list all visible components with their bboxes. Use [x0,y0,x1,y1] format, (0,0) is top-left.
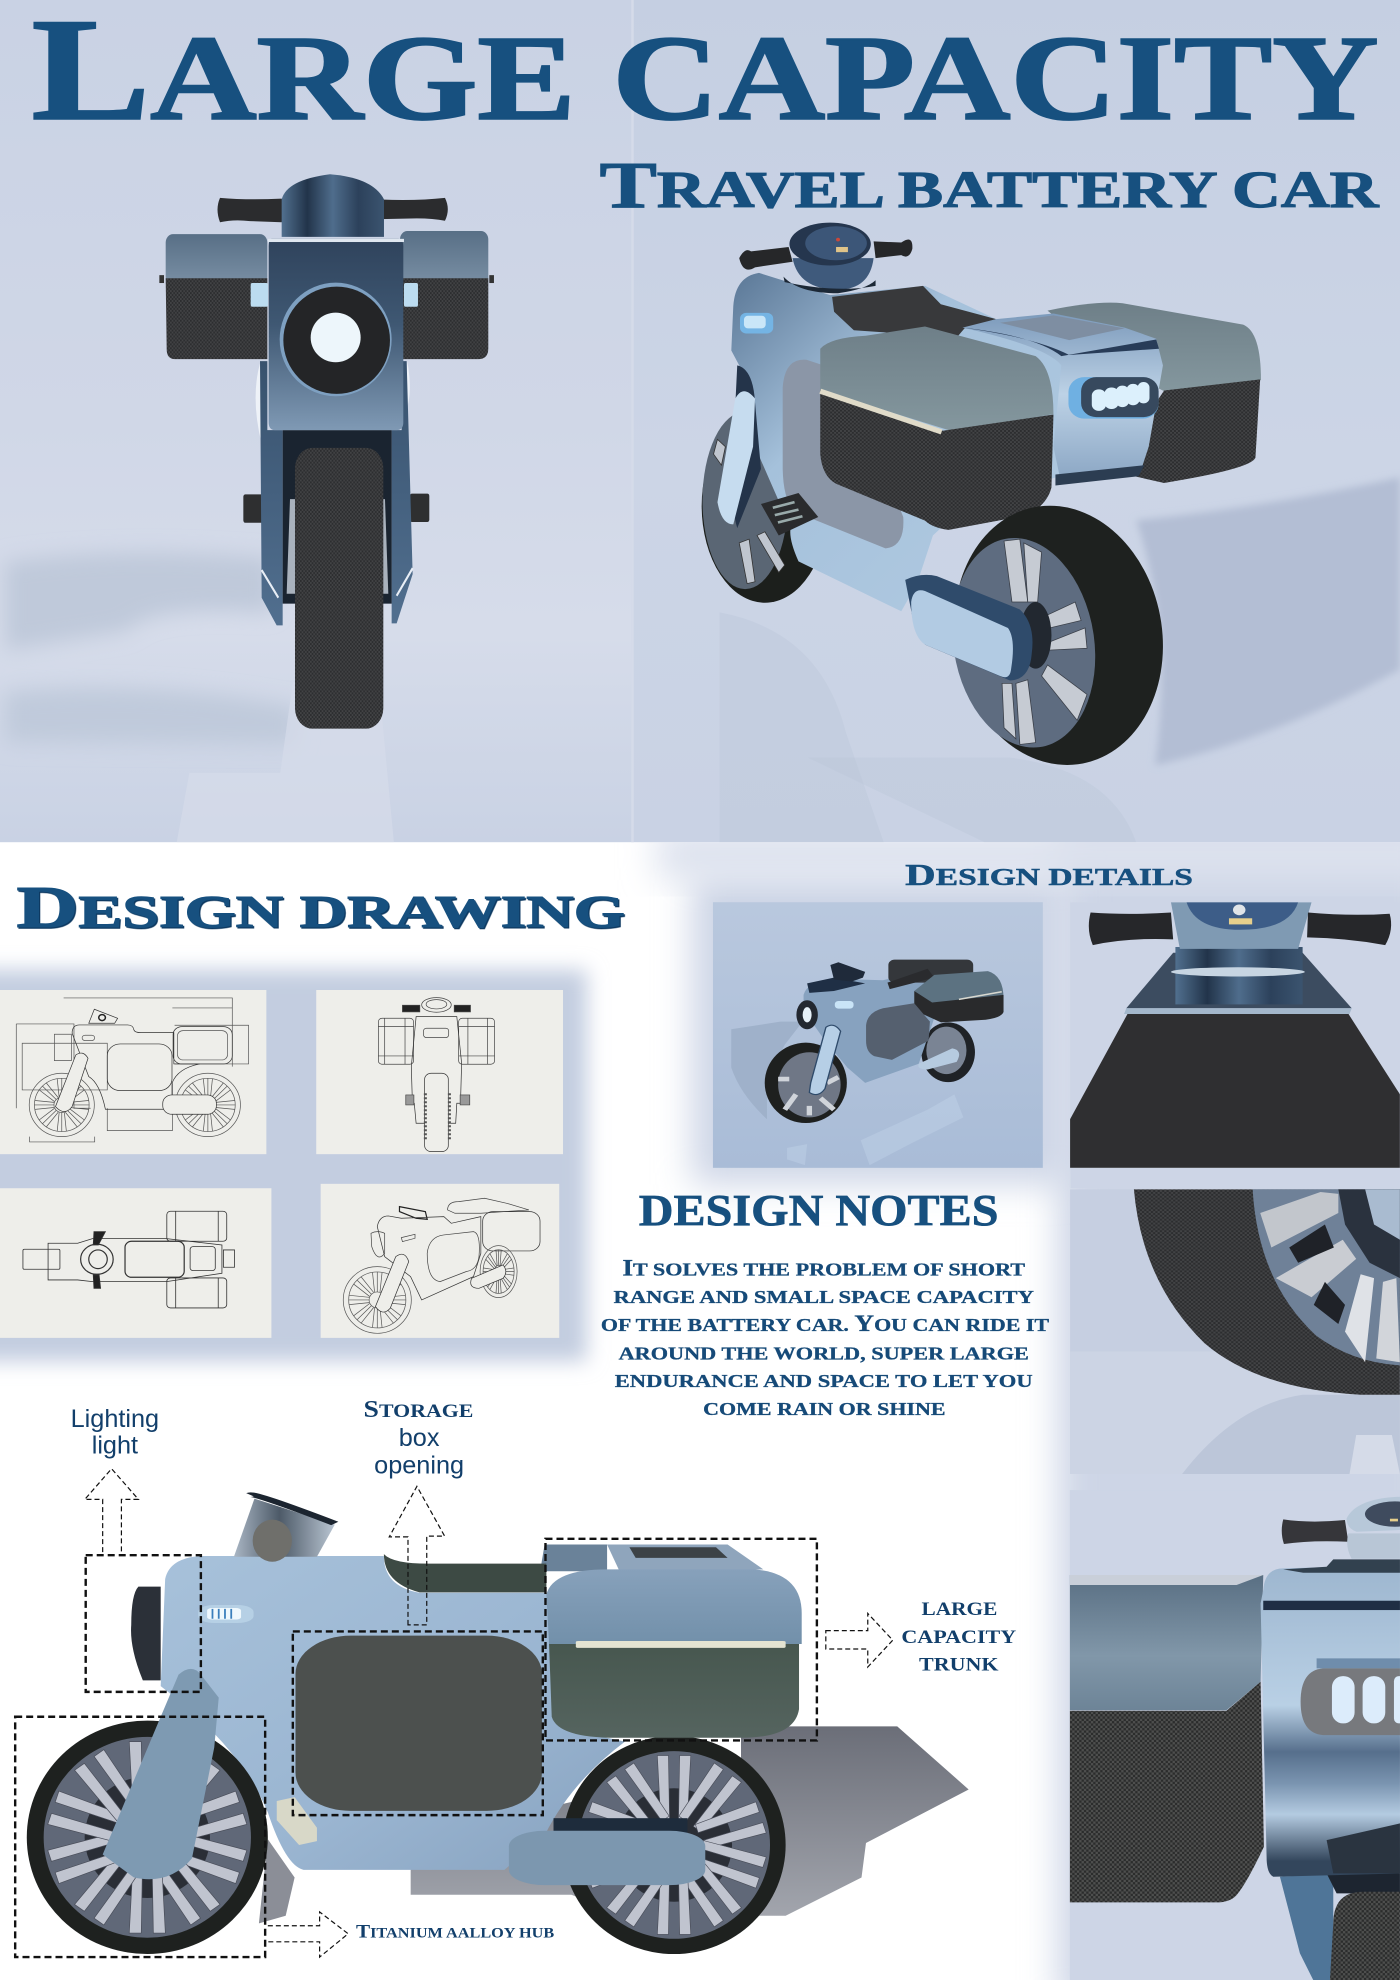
text block: design notes paragraph: OF THE BATTERY CAR. YOU CAN RIDE IT [601,1311,1049,1336]
arch cutout [732,365,761,528]
panel: lower white background with blue glows [0,821,1400,1980]
handlebar pod [830,962,865,981]
instrument pod [783,223,876,293]
floor reflection [787,1094,963,1165]
near case [914,971,1004,1022]
body [804,970,934,1083]
side cases [159,231,494,359]
label: storage box opening: opening [374,1452,464,1480]
tyre [1134,1189,1400,1395]
tyre [295,448,383,729]
arrow: hub [268,1912,348,1957]
reflection [1182,1395,1400,1474]
label: lighting light: light [92,1431,138,1459]
dial head [1171,902,1312,949]
front wheel [702,409,828,603]
illustration: three-quarter rear bike [702,223,1261,778]
photo: handlebar and seat detail [1070,902,1400,1168]
rear carrier top [540,1545,763,1573]
photo: wheel detail [1070,1189,1400,1474]
drawing: top view sketch [0,1188,271,1338]
arrow: lighting [85,1469,138,1552]
foot rest [761,493,818,535]
lamp housing [131,1587,161,1680]
grip [1282,1519,1348,1544]
steering column [282,174,384,237]
rim [1253,1189,1400,1365]
fork cavity [283,430,392,604]
photo: rear light and case detail [1070,1490,1400,1980]
tapered metal [1126,953,1352,1008]
text block: design notes paragraph: ENDURANCE AND SPACE TO LET YOU [615,1371,1033,1391]
indicator [835,1001,854,1009]
handlebars [218,198,448,222]
side indicator [740,313,773,334]
frame body [161,1556,625,1870]
neck [1171,947,1305,1004]
cast shadow [411,1726,969,1916]
kick stand [277,1797,317,1845]
base plate [1283,1559,1400,1573]
panel: hero render background right [631,0,1400,842]
label: lighting light [71,1405,159,1459]
text block: design notes paragraph: IT SOLVES THE PROBLEM OF SHORT [622,1255,1025,1280]
swing arm [509,1818,705,1885]
case weave [1070,1682,1264,1902]
rear wheel [937,493,1180,778]
label: large capacity trunk: CAPACITY [901,1627,1017,1648]
body shell [731,273,1075,611]
luggage case [546,1569,802,1738]
front fork [717,391,755,524]
dashed callout boxes [15,1539,817,1957]
headlamp [280,283,392,396]
fascia [1261,1565,1400,1877]
drawing: perspective sketch [321,1184,559,1338]
foot pegs [243,494,429,523]
arrow: trunk [826,1613,893,1667]
handlebars [739,239,912,270]
case lid [1070,1575,1263,1710]
swing arm [905,575,1032,680]
label: storage box opening: STORAGE [364,1397,473,1423]
text block: design notes paragraph: COME RAIN OR SHINE [703,1399,946,1419]
label: lighting light: Lighting [71,1405,159,1433]
front fork [809,1025,841,1095]
front wheel [27,1721,268,1954]
frame side highlights [256,361,410,444]
grips [1089,913,1391,945]
seat [384,1554,546,1592]
rear arm [918,1048,959,1069]
label: storage box opening: box [399,1424,440,1452]
front wheel [765,1043,847,1123]
text block: design notes paragraph: RANGE AND SMALL SPACE CAPACITY [614,1287,1034,1307]
label: large capacity trunk: LARGE [922,1599,997,1620]
seat leather [1070,1012,1400,1168]
head panel [269,239,403,430]
label: storage box opening [364,1397,473,1480]
drawing: side elevation sketch [0,990,266,1154]
illustration: front view bike [159,174,494,729]
spokes [1260,1189,1400,1362]
panel: hero render background left [0,0,634,842]
heading: design details: D ESIGN DETAILS [905,858,1193,892]
instrument pod [234,1495,335,1562]
rear wheel [562,1736,786,1954]
dark lower fascia and fork [1280,1873,1400,1980]
label: large capacity trunk [901,1599,1017,1676]
recessed panel [783,360,903,548]
rear lamp [1301,1658,1400,1735]
arrow: storage [389,1486,445,1625]
label: large capacity trunk: TRUNK [919,1655,999,1676]
near trunk [820,327,1053,530]
drawing: front elevation sketch [316,990,563,1154]
heading: design notes: DESIGN NOTES [639,1186,999,1235]
cast shadow [731,1022,803,1119]
rear light [1068,377,1159,419]
heading: design drawing: D ESIGN DRAWING [16,874,625,940]
recessed panel [866,1003,930,1060]
seat and far case [887,960,973,989]
illustration: annotated side view bike [15,1469,969,1957]
seat [832,286,996,338]
storage panel [296,1636,542,1811]
label: titanium alloy hub: TITANIUM AALLOY HUB [356,1922,555,1943]
text block: design notes paragraph [601,1255,1049,1419]
side indicator [198,1605,254,1623]
front fork [103,1669,219,1879]
neck and dial [1347,1497,1400,1559]
subtitle: T RAVEL BATTERY CAR [600,149,1379,222]
rear wheel [921,1022,975,1082]
lamp [796,1000,818,1029]
text block: design notes paragraph: AROUND THE WORLD, SUPER LARGE [619,1343,1029,1363]
far trunk [1048,303,1261,483]
top plate and rear fascia [963,314,1163,486]
indicators [251,283,418,307]
tile: mini bike render [713,902,1043,1168]
fork legs [260,361,413,625]
